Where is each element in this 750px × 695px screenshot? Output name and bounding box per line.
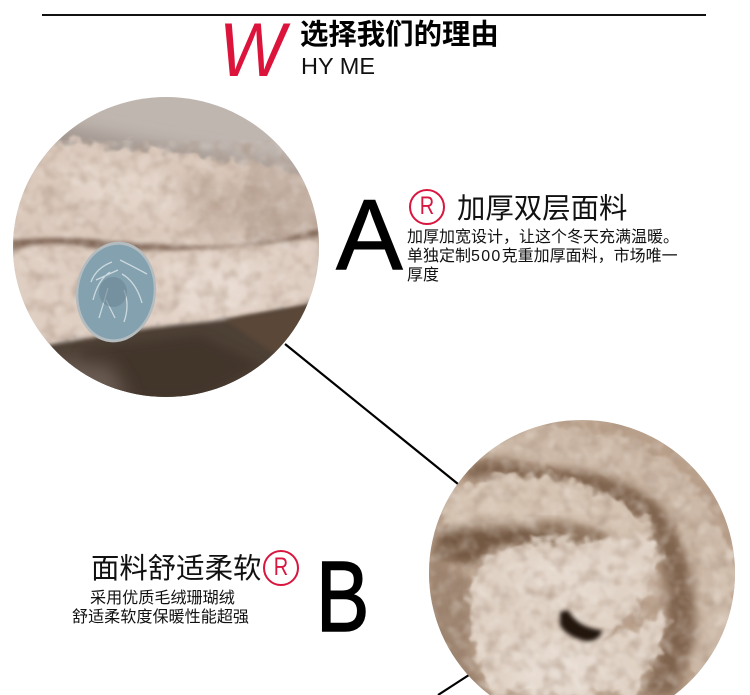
title: 选择我们的理由 xyxy=(300,19,499,51)
right fabric fold xyxy=(710,548,735,634)
heading B: 面料舒适柔软 xyxy=(91,553,261,585)
photo: fabric thickness with coin xyxy=(10,95,322,400)
body text A: 单独定制500克重加厚面料，市场唯一 xyxy=(407,248,678,265)
dark gap between the layers xyxy=(12,228,320,250)
body text B line 2: 舒适柔软度保暖性能超强 xyxy=(72,608,249,626)
upper and lower fabric rolls xyxy=(10,142,320,345)
registered mark B: R xyxy=(274,553,288,581)
outer fabric fold xyxy=(480,426,735,695)
connector line lower xyxy=(438,673,472,695)
middle fabric roll xyxy=(440,474,655,560)
body text A xyxy=(407,228,679,284)
dark folds xyxy=(462,459,696,695)
big W letter: W xyxy=(219,8,285,93)
connector line xyxy=(285,344,458,484)
inner roll xyxy=(470,534,666,695)
registered mark B xyxy=(263,550,299,586)
wooden floor xyxy=(48,301,308,397)
coin xyxy=(76,242,156,342)
body text B: 采用优质毛绒珊瑚绒 xyxy=(90,589,235,607)
top rule xyxy=(42,14,706,16)
photo: rolled plush fabric xyxy=(425,416,739,695)
letter A: A xyxy=(336,179,403,291)
registered mark A: R xyxy=(420,192,434,220)
subtitle: HY ME xyxy=(301,53,375,79)
letter B: B xyxy=(316,541,369,653)
body text A: 加厚加宽设计，让这个冬天充满温暖。 xyxy=(407,229,679,246)
heading A: 加厚双层面料 xyxy=(457,193,627,225)
dark hole in the roll xyxy=(560,610,602,641)
registered mark A xyxy=(409,189,445,225)
body text A: 厚度 xyxy=(407,267,439,284)
left shaded area xyxy=(428,555,490,695)
